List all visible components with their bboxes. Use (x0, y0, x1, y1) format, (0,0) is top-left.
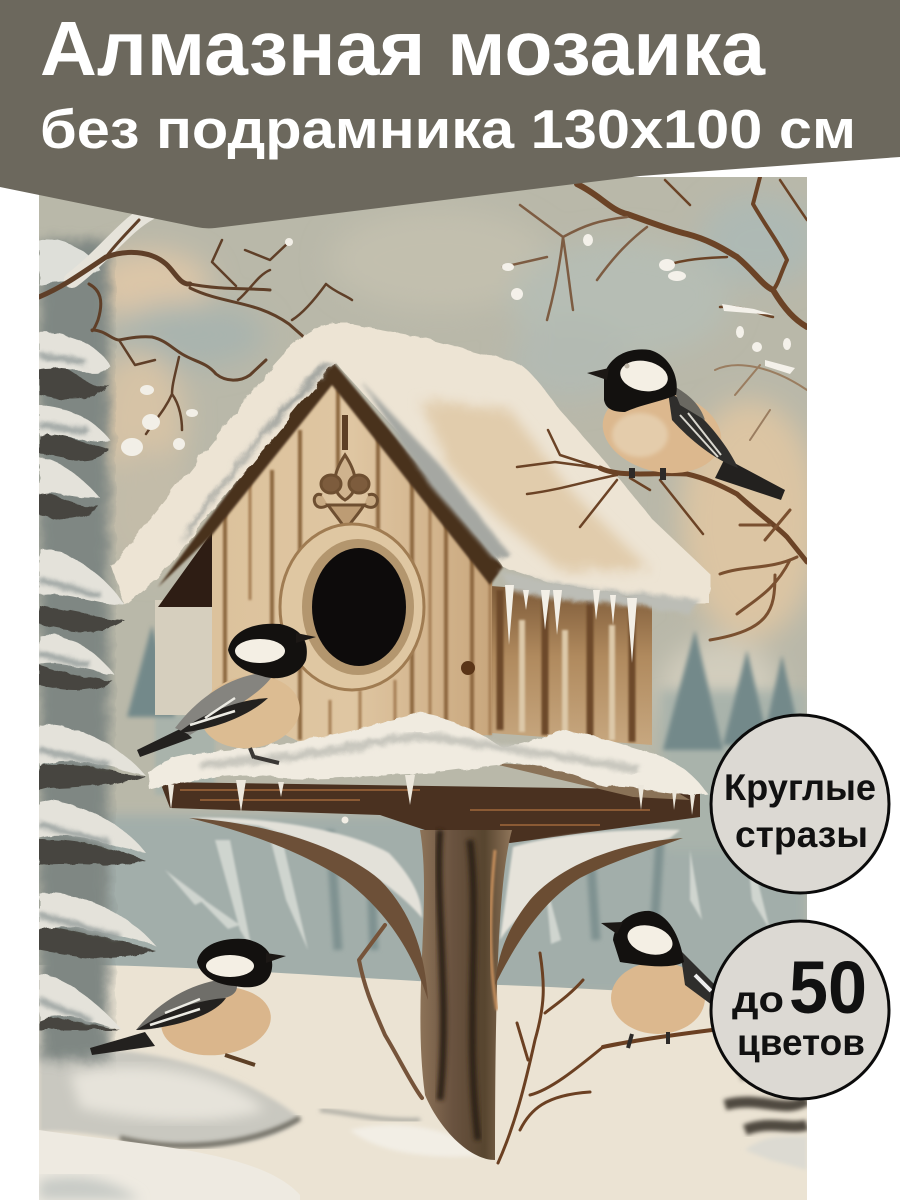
right bracket (495, 838, 683, 985)
left bracket snow (189, 818, 422, 918)
platform (148, 713, 707, 843)
beige roof shading (420, 400, 650, 570)
chickadee on ground (90, 939, 286, 1065)
badge: round rhinestones: стразы (735, 814, 868, 855)
chickadee top right (587, 349, 785, 500)
left fir tree (39, 239, 155, 1060)
right bracket snow (500, 830, 680, 940)
subtitle: без подрамника 130х100 см (40, 98, 856, 160)
grey eave shading (180, 362, 510, 560)
sky (39, 177, 807, 1007)
front wall (212, 372, 492, 742)
snow mound (39, 1049, 300, 1147)
distant forest (100, 625, 807, 995)
right branch with bird (517, 430, 807, 640)
title: Алмазная мозаика (40, 6, 766, 92)
snowy roof (112, 323, 710, 615)
icicles (505, 585, 637, 663)
badge: up to 50 colors: цветов (737, 1022, 865, 1063)
side wall (478, 585, 652, 745)
side wall planks (500, 590, 632, 742)
branches upper right (503, 177, 807, 440)
left bracket (189, 818, 428, 1000)
entrance hole (312, 548, 406, 666)
fir shadows (39, 350, 155, 1030)
badge: round rhinestones (711, 715, 889, 893)
birdhouse (112, 323, 710, 745)
entrance ring (280, 524, 424, 690)
snowy ground (39, 965, 807, 1200)
branches upper left (39, 212, 352, 434)
header banner (0, 0, 900, 228)
badge: up to 50 colors: до (732, 979, 784, 1020)
chickadee lower right (601, 911, 715, 1048)
painting: birdhouse in winter (39, 177, 820, 1200)
fir snow shading (39, 355, 120, 1020)
pale side panel under left eave (155, 600, 212, 715)
ground twigs (359, 925, 712, 1163)
platform icicles (168, 775, 695, 815)
badge: up to 50 colors (711, 921, 889, 1099)
front wall planks (225, 390, 490, 740)
badge: round rhinestones: Круглые (724, 767, 876, 808)
fir snow (39, 333, 155, 1030)
gable shadow (158, 357, 503, 587)
door latch (461, 661, 475, 675)
chickadee on platform (137, 624, 316, 763)
shadow under left eave (158, 532, 212, 607)
fleur-de-lis ornament (314, 415, 377, 530)
badge: up to 50 colors: 50 (789, 946, 867, 1029)
snow blobs on left twigs (121, 238, 293, 456)
sky colour patches (106, 205, 807, 692)
support post (189, 818, 683, 1160)
snow blobs on right twigs (502, 234, 795, 374)
